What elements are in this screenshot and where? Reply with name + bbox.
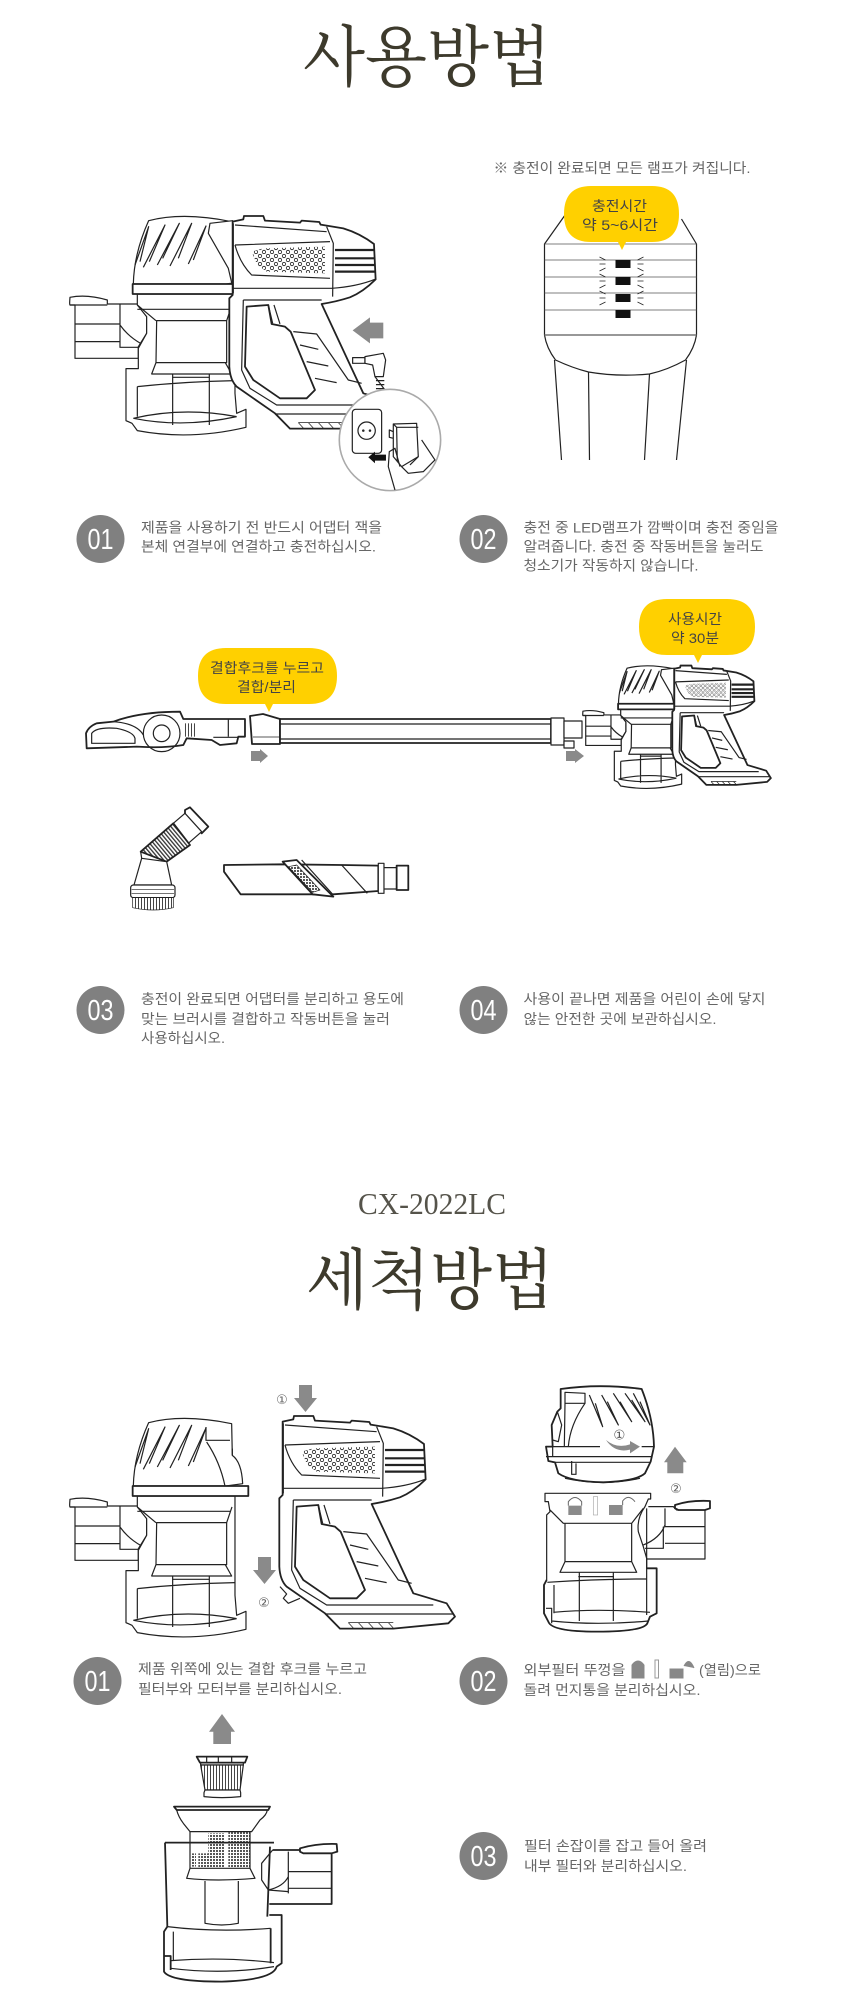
callout: run time	[639, 599, 755, 663]
callout: charge time	[564, 186, 679, 250]
step 03: 03	[88, 995, 114, 1027]
arrow: separate down 2	[253, 1557, 276, 1584]
callout: charge time: 충전시간	[592, 198, 647, 214]
filter cup with mesh	[174, 1807, 270, 1880]
step 03	[76, 986, 404, 1046]
icon: separator	[655, 1660, 658, 1678]
step 02: 알려줍니다. 충전 중 작동버튼을 눌러도	[524, 538, 764, 554]
step 03: 사용하십시오.	[141, 1030, 225, 1046]
arrow: lift filter	[209, 1714, 235, 1744]
icon: unlocked	[609, 1497, 635, 1515]
dust bin cutaway	[164, 1843, 337, 1982]
body with dust bin	[70, 1418, 248, 1637]
icon: lock	[632, 1661, 644, 1678]
marker 1: ①	[276, 1393, 288, 1408]
step 02	[460, 1657, 761, 1705]
model name: CX-2022LC	[358, 1186, 506, 1221]
callout: charge time: 약 5~6시간	[582, 217, 658, 233]
step 04	[460, 986, 766, 1034]
callout: coupling hook: 결합/분리	[237, 679, 296, 695]
callout: wall socket magnifier	[339, 389, 441, 491]
LED indicators	[616, 260, 630, 318]
icon: open lock	[670, 1661, 694, 1678]
arrow: plug-in direction	[353, 317, 383, 343]
step 01: 제품을 사용하기 전 반드시 어댑터 잭을	[141, 520, 382, 536]
step 04: 않는 안전한 곳에 보관하십시오.	[524, 1011, 716, 1027]
title: cleaning: 세척방법	[306, 1245, 554, 1318]
inner filter	[197, 1757, 247, 1798]
step 03: 03	[470, 1841, 496, 1873]
marker 2: ②	[670, 1482, 682, 1497]
step 02	[460, 515, 779, 574]
icon: charging plug	[353, 353, 386, 390]
LED blink marks	[600, 257, 644, 305]
callout: coupling hook	[198, 648, 337, 712]
callout: run time: 사용시간	[668, 611, 722, 627]
icon: locked	[568, 1497, 582, 1515]
separated motor head	[546, 1386, 654, 1482]
step 03: 내부 필터와 분리하십시오.	[524, 1858, 687, 1874]
tool: angled brush	[131, 807, 208, 910]
step 01: 본체 연결부에 연결하고 충전하십시오.	[141, 538, 376, 554]
step 02: (열림)으로	[699, 1662, 761, 1678]
arrow: tube to body	[566, 749, 584, 763]
step 01: 01	[84, 1666, 110, 1698]
arrow: into socket	[368, 452, 386, 463]
tool: crevice nozzle	[224, 860, 408, 897]
small vacuum body	[583, 666, 771, 788]
step 04: 04	[470, 995, 496, 1027]
LED panel illustration	[544, 213, 696, 460]
floor nozzle	[86, 712, 245, 752]
panel body	[544, 213, 696, 460]
callout: run time: 약 30분	[671, 630, 719, 646]
step 02: 충전 중 LED램프가 깜빡이며 충전 중임을	[524, 520, 779, 536]
step 03: 필터 손잡이를 잡고 들어 올려	[524, 1838, 707, 1854]
vacuum charging illustration	[70, 216, 441, 491]
step 01	[76, 515, 382, 563]
step 01	[74, 1657, 367, 1705]
step 01: 제품 위쪽에 있는 결합 후크를 누르고	[138, 1661, 367, 1677]
arrow: twist	[606, 1440, 640, 1453]
step 03	[460, 1832, 707, 1880]
icon: divider	[593, 1497, 598, 1515]
step 02: 02	[470, 524, 496, 556]
step 02: 돌려 먼지통을 분리하십시오.	[524, 1682, 700, 1698]
extension tube	[250, 714, 582, 748]
step 04: 사용이 끝나면 제품을 어린이 손에 닿지	[524, 991, 766, 1007]
motor unit	[279, 1416, 455, 1629]
step 03: 충전이 완료되면 어댑터를 분리하고 용도에	[141, 991, 404, 1007]
step 01: 01	[88, 524, 114, 556]
arrow: press down 1	[294, 1385, 317, 1412]
marker 2: ②	[258, 1596, 270, 1611]
step 02: 외부필터 뚜껑을	[524, 1662, 626, 1678]
step 03: 맞는 브러시를 결합하고 작동버튼을 눌러	[141, 1011, 390, 1027]
step 02: 청소기가 작동하지 않습니다.	[524, 558, 698, 574]
dust bin with lock marks	[544, 1493, 710, 1632]
arrow: lift up	[664, 1447, 687, 1473]
title: usage: 사용방법	[303, 22, 551, 95]
arrow: nozzle to tube	[251, 749, 268, 763]
callout: coupling hook: 결합후크를 누르고	[210, 660, 324, 676]
note: lamps off: ※ 충전이 완료되면 모든 램프가 켜집니다.	[494, 160, 750, 176]
marker 1: ①	[613, 1428, 625, 1443]
step 02: 02	[470, 1666, 496, 1698]
step 01: 필터부와 모터부를 분리하십시오.	[138, 1681, 342, 1697]
